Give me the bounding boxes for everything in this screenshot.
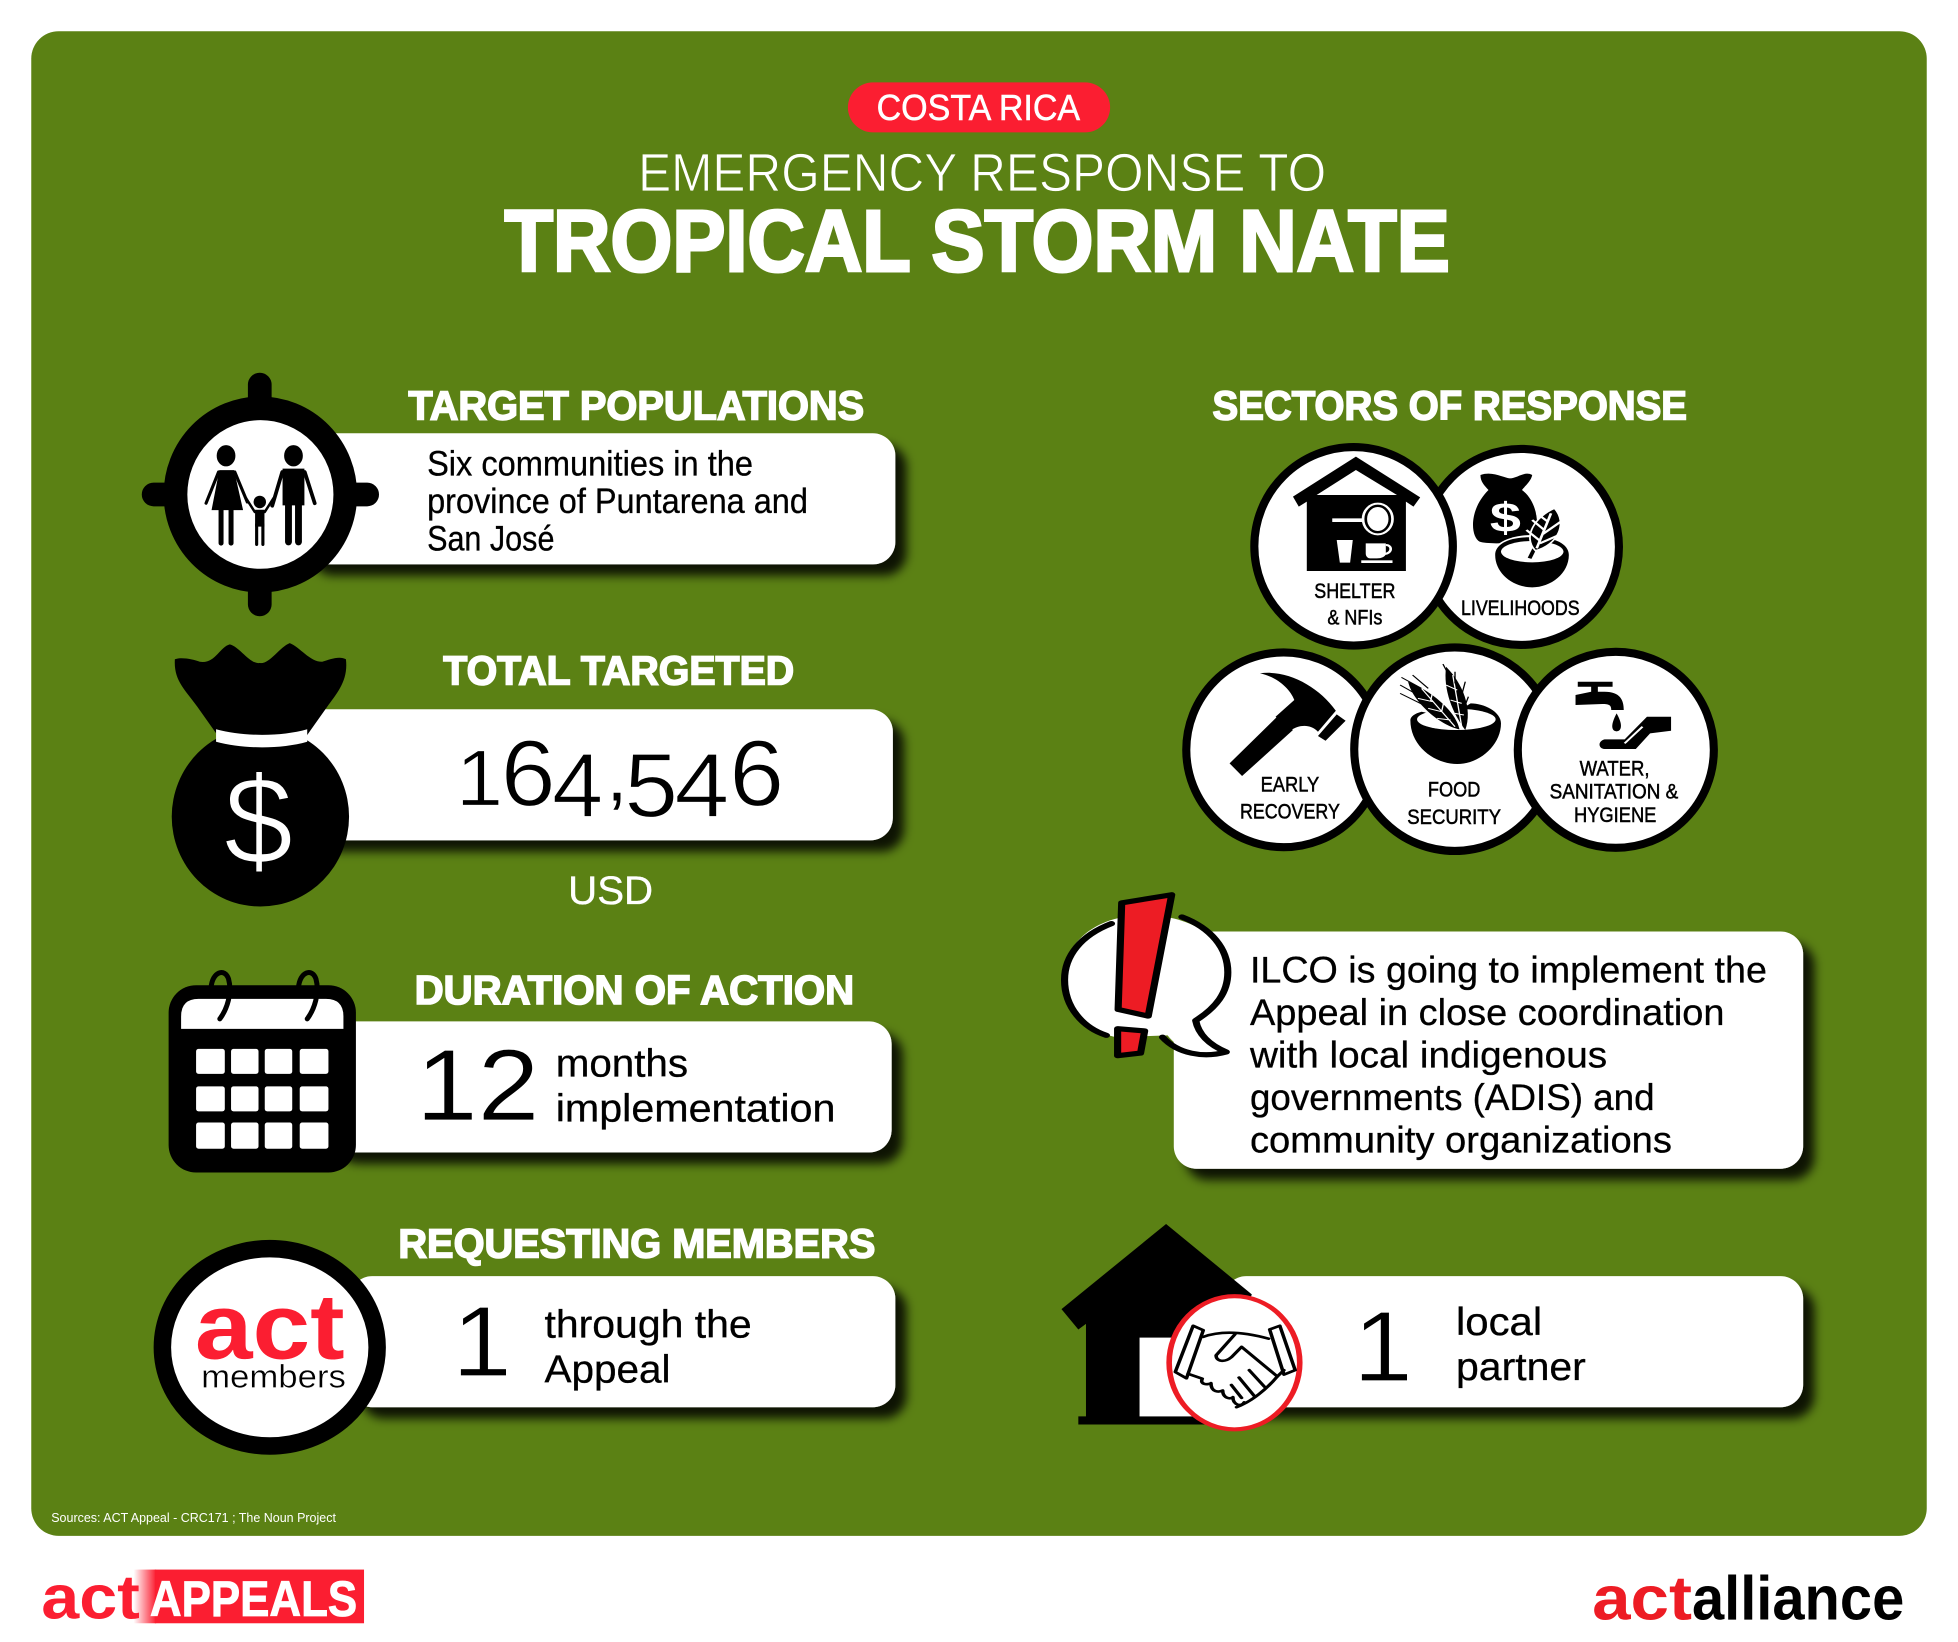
duration text xyxy=(556,1042,835,1130)
card xyxy=(350,1276,895,1407)
sector: early recovery: RECOVERY xyxy=(1240,801,1340,824)
card xyxy=(1174,932,1803,1169)
partner text: local xyxy=(1456,1301,1542,1344)
amount: 4 xyxy=(674,735,729,837)
amount: 1 xyxy=(456,733,503,822)
sector: food security xyxy=(1354,647,1555,851)
icon: house with handshake xyxy=(1061,1224,1300,1429)
amount: 6 xyxy=(729,720,784,825)
card xyxy=(325,1021,892,1153)
logo: act appeals xyxy=(41,1562,364,1632)
sector: shelter and NFIs: SHELTER xyxy=(1314,580,1395,603)
card text: Six communities in the xyxy=(427,445,753,484)
amount xyxy=(456,720,784,837)
panel: requesting members xyxy=(162,1220,895,1446)
sector: water, sanitation and hygiene xyxy=(1518,652,1714,848)
logo: act appeals: act xyxy=(41,1562,140,1632)
partner text: partner xyxy=(1456,1346,1586,1389)
number 1: 1 xyxy=(1353,1292,1413,1403)
card text: San José xyxy=(427,520,554,559)
badge: Costa Rica: COSTA RICA xyxy=(877,87,1081,128)
duration text: implementation xyxy=(556,1087,835,1130)
note text: Appeal in close coordination xyxy=(1250,991,1724,1033)
icon: speech bubble with exclamation mark xyxy=(1063,895,1229,1056)
sector: shelter and NFIs xyxy=(1254,447,1453,646)
heading: DURATION OF ACTION xyxy=(415,967,854,1013)
sector: livelihoods: LIVELIHOODS xyxy=(1461,597,1580,620)
icon: calendar xyxy=(169,972,356,1173)
note text xyxy=(1249,949,1767,1161)
sector: shelter and NFIs: & NFIs xyxy=(1327,606,1382,629)
number 1: 1 xyxy=(452,1287,512,1398)
icon: money bag xyxy=(172,643,349,907)
logo: act alliance: alliance xyxy=(1692,1564,1904,1634)
amount: 4 xyxy=(552,735,603,837)
number 12: 12 xyxy=(416,1029,539,1142)
source note: Sources: ACT Appeal - CRC171 ; The Noun Project xyxy=(51,1510,336,1525)
sector: livelihoods xyxy=(1423,449,1619,645)
card xyxy=(1224,1276,1803,1407)
members text: Appeal xyxy=(544,1348,671,1391)
amount: , xyxy=(607,735,627,816)
panel: duration of action xyxy=(169,967,892,1173)
icon: act members badge xyxy=(162,1249,377,1446)
panel: total targeted xyxy=(172,643,893,913)
sector: water, sanitation and hygiene: WATER, xyxy=(1580,757,1650,780)
subtitle: EMERGENCY RESPONSE TO xyxy=(638,143,1326,203)
sector: food security: SECURITY xyxy=(1407,806,1501,829)
sector: early recovery: EARLY xyxy=(1261,774,1319,797)
sector: water, sanitation and hygiene: SANITATION & xyxy=(1550,781,1678,804)
members text xyxy=(544,1303,752,1391)
sector: livelihoods: $ xyxy=(1490,495,1521,541)
icon: money bag: $ xyxy=(224,752,293,891)
sector: early recovery xyxy=(1186,652,1381,847)
panel: sectors of response xyxy=(1186,383,1714,851)
heading: SECTORS OF RESPONSE xyxy=(1213,383,1687,429)
title: TROPICAL STORM NATE xyxy=(505,192,1450,290)
panel: coordination note xyxy=(1063,895,1803,1169)
partner text xyxy=(1456,1301,1586,1389)
note text: governments (ADIS) and xyxy=(1250,1076,1655,1118)
sector: food security: FOOD xyxy=(1428,779,1480,802)
logo: act alliance xyxy=(1592,1564,1904,1634)
card text xyxy=(427,445,808,559)
icon: act members badge: members xyxy=(201,1358,346,1394)
header xyxy=(505,82,1450,290)
logo: act appeals: APPEALS xyxy=(150,1571,357,1627)
note text: community organizations xyxy=(1250,1119,1672,1161)
logo: act alliance: act xyxy=(1592,1564,1692,1634)
heading: REQUESTING MEMBERS xyxy=(398,1220,875,1266)
panel: local partner xyxy=(1061,1224,1803,1429)
icon: act members badge: act xyxy=(195,1275,345,1379)
badge: Costa Rica xyxy=(848,82,1110,132)
note text: ILCO is going to implement the xyxy=(1250,949,1767,991)
heading: TOTAL TARGETED xyxy=(443,647,794,693)
panel: target populations xyxy=(154,383,895,604)
members text: through the xyxy=(544,1303,752,1346)
card xyxy=(300,433,895,564)
duration text: months xyxy=(556,1042,688,1085)
currency label: USD xyxy=(568,869,653,913)
card text: province of Puntarena and xyxy=(427,482,808,521)
sector: water, sanitation and hygiene: HYGIENE xyxy=(1574,804,1656,827)
note text: with local indigenous xyxy=(1249,1034,1607,1076)
amount: 5 xyxy=(624,735,678,837)
heading: TARGET POPULATIONS xyxy=(408,383,864,429)
card xyxy=(300,709,893,840)
icon: target with family xyxy=(154,385,367,604)
amount: 6 xyxy=(501,720,556,825)
